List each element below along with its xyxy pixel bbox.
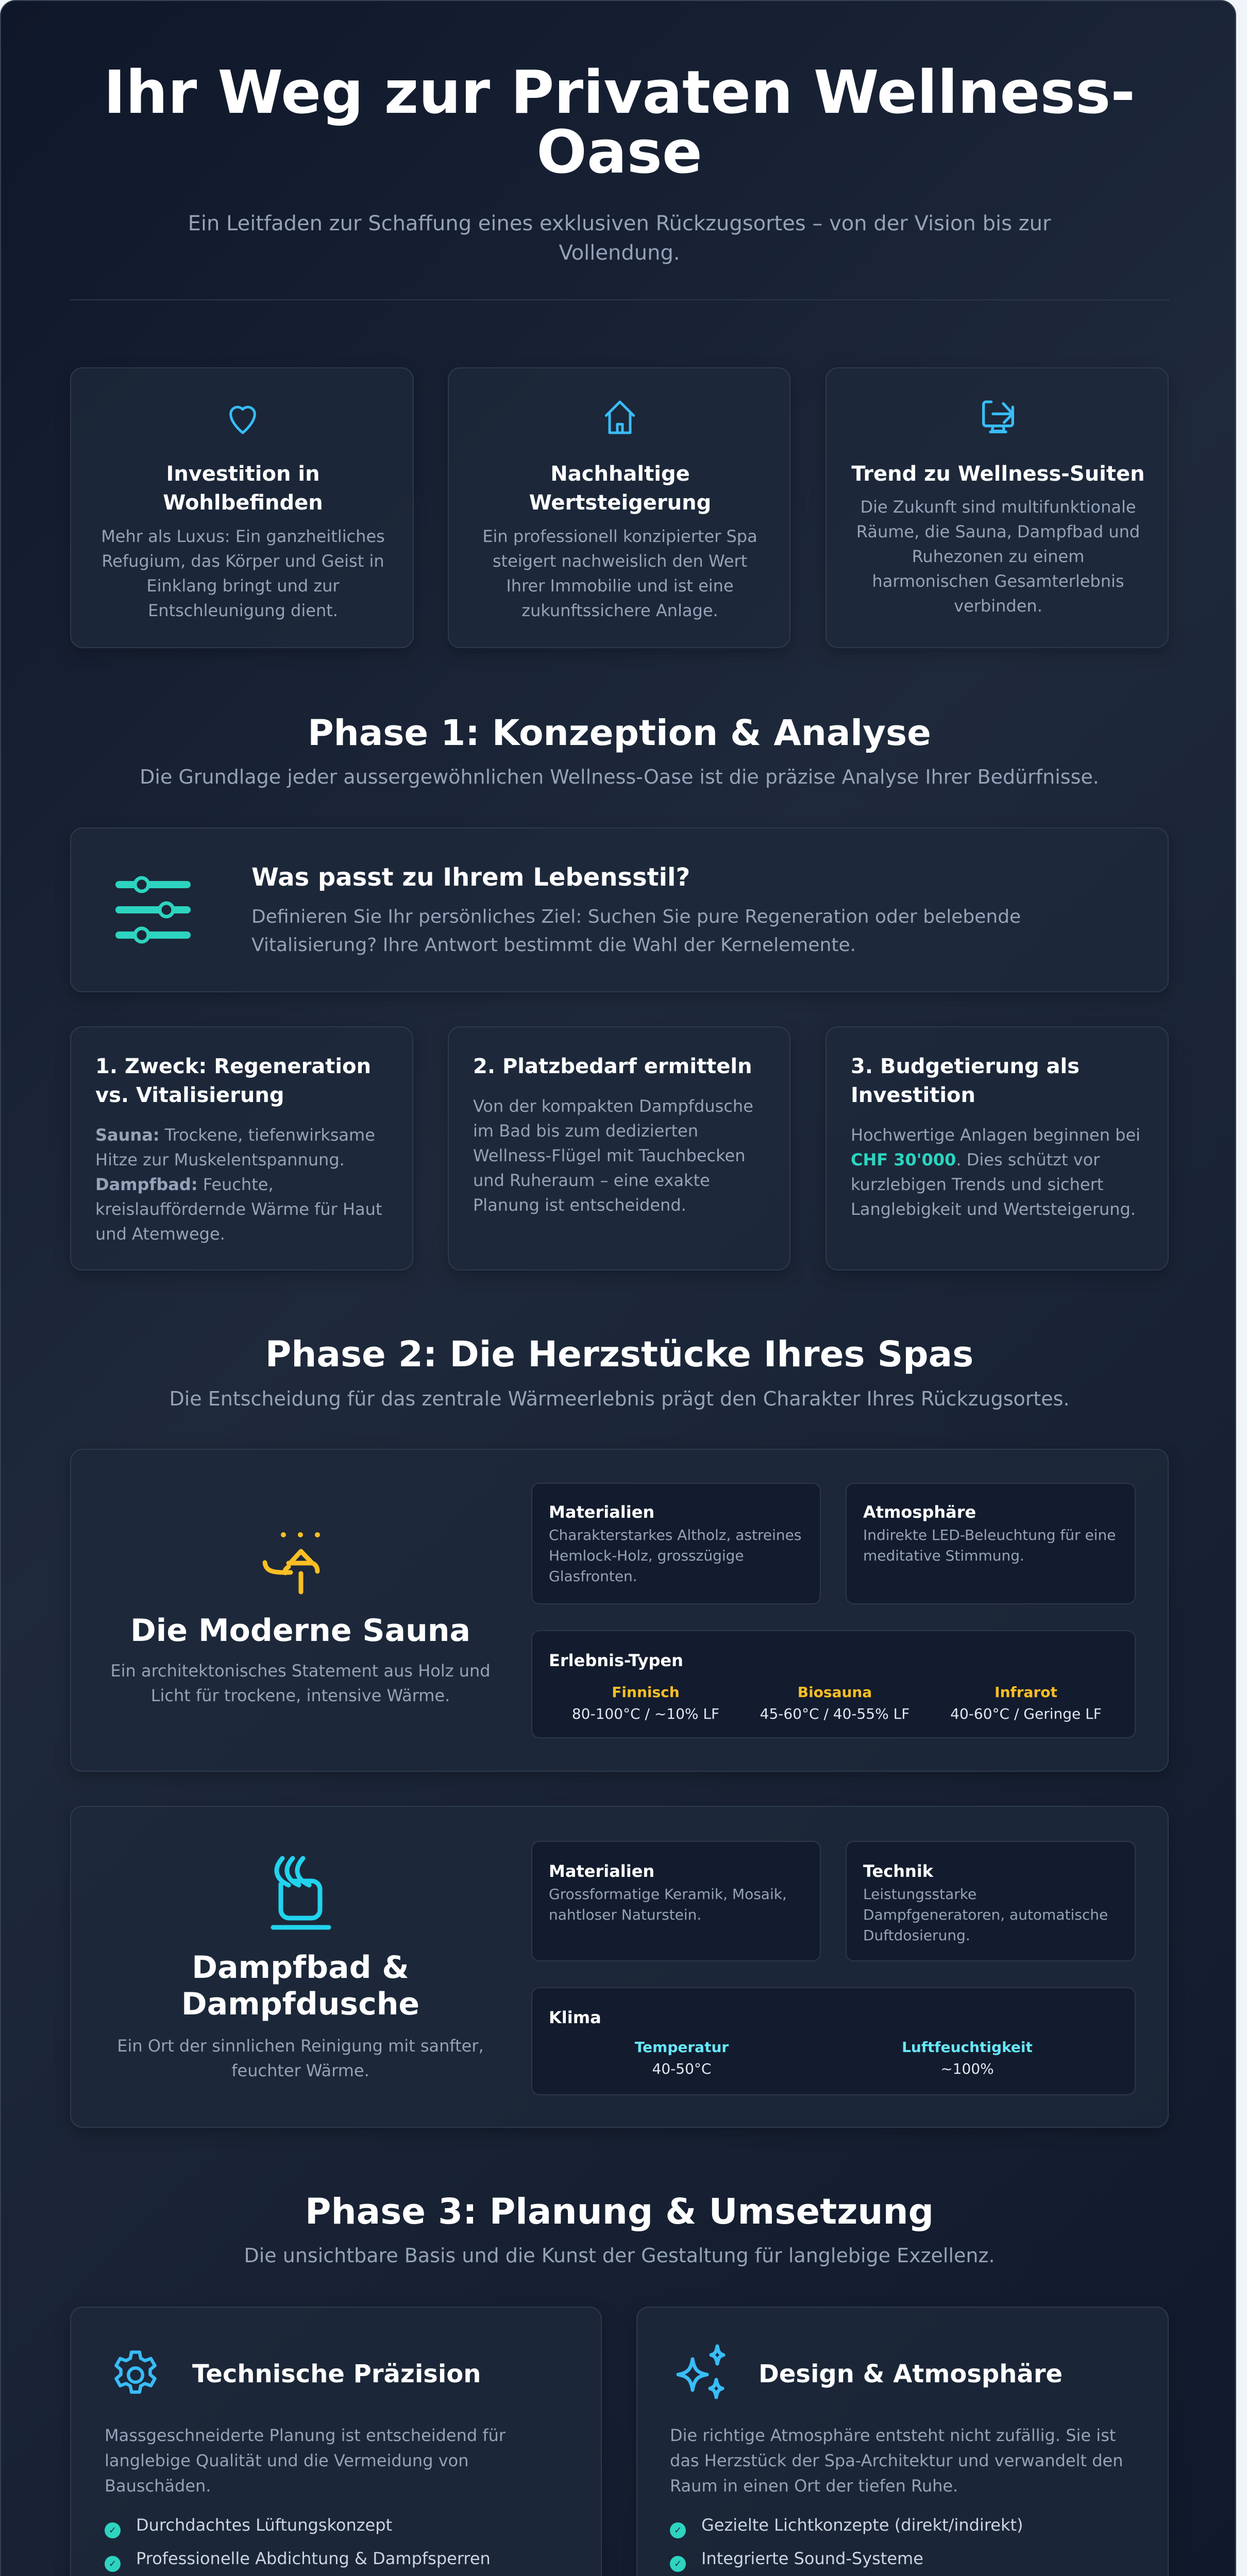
heading: Wertsteigerung <box>529 491 711 515</box>
icon: monitor arrow <box>982 400 1014 433</box>
list: ✓ <box>674 2558 682 2569</box>
text: Die richtige Atmosphäre entsteht nicht zufällig. Sie ist das Herzstück der Spa-Architektur und verwandelt den Raum in einen Ort der tiefen Ruhe. <box>670 2426 1123 2496</box>
heading: Phase 3: Phase 3: Planung & Umsetzung <box>305 2191 934 2232</box>
subheading: Phase 2: Die Entscheidung für das zentrale Wärmeerlebnis prägt den Charakter Ihres Rückzugsortes. <box>169 1387 1070 1410</box>
box: Technik: Leistungsstarke Dampfgeneratoren, automatische Duftdosierung. <box>863 1886 1108 1944</box>
heading: Wohlbefinden <box>163 491 323 515</box>
heading: Phase 2: Phase 2: Die Herzstücke Ihres Spas <box>265 1334 973 1375</box>
box: Materialien <box>531 1483 821 1604</box>
list: ✓ <box>109 2525 116 2536</box>
subheading: Phase 1: Die Grundlage jeder aussergewöhnlichen Wellness-Oase ist die präzise Analyse Ihrer Bedürfnisse. <box>140 766 1099 788</box>
card: Technische Präzision <box>70 2307 602 2576</box>
text: Von der kompakten Dampfdusche im Bad bis zum dedizierten Wellness-Flügel mit Tauchbecken und Ruheraum – eine exakte Planung ist entscheidend. <box>473 1096 753 1215</box>
box: Erlebnis-Typen: Infrarot <box>995 1684 1057 1701</box>
text: Mehr als Luxus: Ein ganzheitliches Refugium, das Körper und Geist in Einklang bringt und zur Entschleunigung dient. <box>101 527 385 620</box>
box: Erlebnis-Typen <box>531 1630 1136 1738</box>
icon: house <box>605 401 635 434</box>
icon: heart <box>229 406 256 434</box>
heading: Technische Präzision <box>192 2360 481 2388</box>
box: Technik <box>846 1841 1136 1961</box>
heading <box>181 1950 419 2022</box>
icon: gear <box>114 2350 157 2394</box>
box: Klima: Klima <box>549 2008 601 2027</box>
text: Sauna: Trockene, tiefenwirksame Hitze zur Muskelentspannung. Dampfbad: Feuchte, kreislauffördernde Wärme für Haut und Atemwege. <box>95 1125 382 1244</box>
title: Oase <box>536 118 702 187</box>
heading: Was passt zu Ihrem Lebensstil? <box>251 863 690 892</box>
box: Materialien: Materialien <box>549 1861 654 1881</box>
heading: Trend zu Wellness-Suiten <box>851 462 1145 486</box>
box: Atmosphäre: Atmosphäre <box>863 1502 976 1522</box>
title: Ihr Weg zur Privaten Wellness- <box>104 58 1135 127</box>
icon: steam <box>271 1856 331 1930</box>
box: Erlebnis-Typen: Erlebnis-Typen <box>549 1651 683 1670</box>
card: Platzbedarf <box>448 1026 790 1270</box>
list: Integrierte Sound-Systeme <box>701 2549 923 2568</box>
box: Klima <box>531 1987 1136 2095</box>
box: Klima: 40-50°C <box>652 2060 711 2077</box>
heading: 2. Platzbedarf ermitteln <box>473 1055 752 1078</box>
box: Materialien: Grossformatige Keramik, Mosaik, nahtloser Naturstein. <box>549 1886 787 1923</box>
list <box>105 2515 491 2572</box>
list: ✓ <box>674 2525 682 2536</box>
text: Massgeschneiderte Planung ist entscheidend für langlebige Qualität und die Vermeidung von Bauschäden. <box>105 2426 505 2496</box>
box: Klima: Luftfeuchtigkeit <box>902 2039 1033 2056</box>
heading: Investition in <box>166 462 320 486</box>
subtitle: Ein Leitfaden zur Schaffung eines exklusiven Rückzugsortes – von der Vision bis zur Vollendung. <box>188 212 1051 265</box>
text: Ein architektonisches Statement aus Holz und Licht für trockene, intensive Wärme. <box>110 1661 491 1705</box>
box: Erlebnis-Typen: Biosauna <box>798 1684 872 1701</box>
box: Atmosphäre <box>846 1483 1136 1604</box>
icon: sparkles <box>676 2344 726 2399</box>
list: Professionelle Abdichtung & Dampfsperren <box>136 2549 491 2568</box>
heading: Phase 1: Phase 1: Konzeption & Analyse <box>308 713 931 754</box>
list: Gezielte Lichtkonzepte (direkt/indirekt) <box>701 2515 1023 2535</box>
card: Design & Atmosphäre <box>636 2307 1169 2576</box>
icon: sauna <box>263 1532 320 1594</box>
heading: Die Moderne Sauna <box>130 1613 470 1649</box>
panel: Lebensstil <box>70 827 1169 992</box>
heading: Dampfbad & <box>192 1950 409 1986</box>
card: Wertsteigerung <box>448 367 790 648</box>
box: Erlebnis-Typen: 40-60°C / Geringe LF <box>950 1705 1102 1722</box>
list: ✓ <box>109 2558 116 2569</box>
card: Trend <box>825 367 1169 648</box>
heading <box>163 462 323 515</box>
box: Atmosphäre: Indirekte LED-Beleuchtung für eine meditative Stimmung. <box>863 1527 1116 1564</box>
heading: Design & Atmosphäre <box>759 2360 1063 2388</box>
box: Erlebnis-Typen: 45-60°C / 40-55% LF <box>760 1705 909 1722</box>
panel: Sauna <box>70 1449 1169 1772</box>
heading: Nachhaltige <box>550 462 690 486</box>
box: Materialien: Materialien <box>549 1502 654 1522</box>
card: Budget <box>825 1026 1169 1270</box>
box: Erlebnis-Typen: Finnisch <box>612 1684 680 1701</box>
card: Investition <box>70 367 414 648</box>
box: Erlebnis-Typen: 80-100°C / ~10% LF <box>572 1705 719 1722</box>
heading <box>529 462 711 515</box>
heading: 3. Budgetierung als Investition <box>851 1055 1080 1107</box>
panel: Dampfbad <box>70 1806 1169 2128</box>
text: Ein Ort der sinnlichen Reinigung mit sanfter, feuchter Wärme. <box>117 2036 484 2080</box>
box: Materialien <box>531 1841 821 1961</box>
text: Hochwertige Anlagen beginnen bei CHF 30'000. Dies schützt vor kurzlebigen Trends und sichert Langlebigkeit und Wertsteigerung. <box>851 1125 1140 1219</box>
list <box>670 2515 1023 2572</box>
box: Klima: ~100% <box>940 2060 994 2077</box>
box: Technik: Technik <box>863 1861 933 1881</box>
heading: 1. Zweck: Regeneration vs. Vitalisierung <box>95 1055 371 1107</box>
text: Ein professionell konzipierter Spa steigert nachweislich den Wert Ihrer Immobilie und ist eine zukunftssichere Anlage. <box>482 527 757 620</box>
list: Durchdachtes Lüftungskonzept <box>136 2515 392 2535</box>
card: Zweck <box>70 1026 413 1270</box>
text: Die Zukunft sind multifunktionale Räume, die Sauna, Dampfbad und Ruhezonen zu einem harmonischen Gesamterlebnis verbinden. <box>856 497 1140 616</box>
title <box>104 58 1135 187</box>
text: Definieren Sie Ihr persönliches Ziel: Suchen Sie pure Regeneration oder belebende Vitalisierung? Ihre Antwort bestimmt die Wahl der Kernelemente. <box>251 906 1021 956</box>
icon: sliders <box>115 876 191 944</box>
heading: Dampfdusche <box>181 1986 419 2022</box>
box: Materialien: Charakterstarkes Altholz, astreines Hemlock-Holz, grosszügige Glasfronten. <box>549 1527 801 1585</box>
subheading: Phase 3: Die unsichtbare Basis und die Kunst der Gestaltung für langlebige Exzellenz. <box>244 2244 995 2267</box>
box: Klima: Temperatur <box>635 2039 729 2056</box>
